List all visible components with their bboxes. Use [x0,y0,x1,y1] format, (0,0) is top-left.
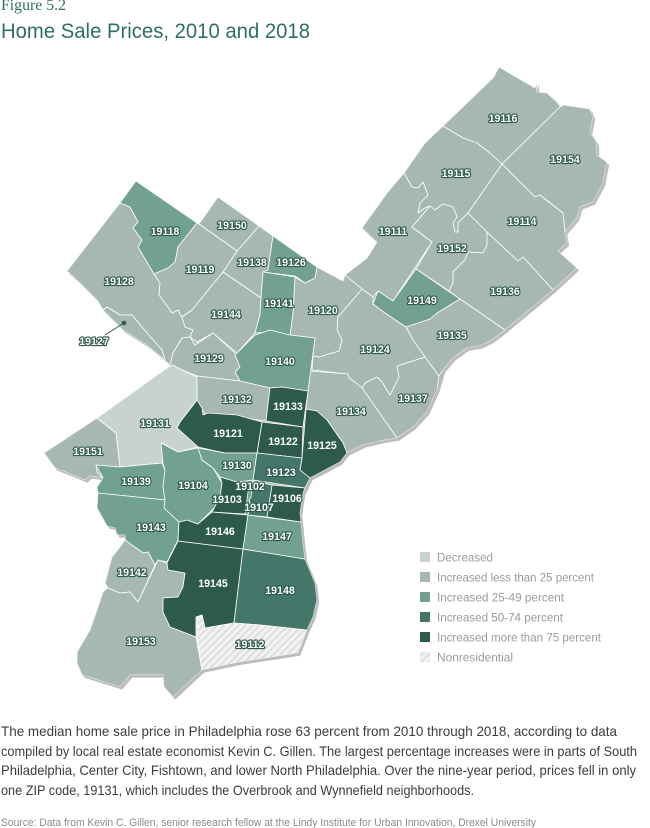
ZIP code labels: 19128 [104,276,134,288]
ZIP code areas [44,67,607,697]
ZIP code labels: 19130 [222,460,252,472]
ZIP code labels: 19122 [268,436,298,448]
ZIP code labels: 19135 [437,330,467,342]
river shadow under the city outline [46,70,609,700]
ZIP code labels: 19133 [273,401,303,413]
ZIP code labels: 19104 [178,480,208,492]
ZIP code labels: 19114 [508,216,537,228]
title: Home Sale Prices, 2010 and 2018 [1,19,310,43]
ZIP code labels: 19151 [73,446,103,458]
ZIP code labels: 19121 [213,428,243,440]
ZIP code labels: 19126 [276,257,306,269]
ZIP code labels: 19112 [236,639,265,651]
ZIP code labels: 19140 [265,356,295,368]
leader line for 19127 [105,321,126,335]
ZIP code labels: 19148 [265,585,295,597]
description paragraph: one ZIP code, 19131, which includes the Overbrook and Wynnefield neighborhoods. [1,782,474,798]
ZIP code labels: 19127 [79,336,109,348]
ZIP code labels: 19119 [186,264,215,276]
legend: Increased 50-74 percent [437,610,564,624]
ZIP code labels: 19142 [117,567,147,579]
ZIP code labels: 19137 [398,393,428,405]
ZIP code labels: 19107 [244,502,274,514]
ZIP code labels: 19123 [266,467,296,479]
ZIP code labels: 19152 [437,243,467,255]
choropleth map of Philadelphia ZIP codes [30,60,630,710]
ZIP code labels: 19131 [140,418,170,430]
legend: Increased more than 75 percent [437,630,602,644]
ZIP code labels: 19143 [136,522,166,534]
legend: Decreased [437,550,493,564]
legend: Nonresidential [437,650,513,664]
ZIP code labels: 19153 [126,636,156,648]
ZIP code labels: 19136 [490,286,520,298]
ZIP code labels: 19149 [407,295,437,307]
ZIP code labels: 19116 [489,113,518,125]
ZIP code labels: 19103 [212,494,242,506]
ZIP code labels: 19139 [121,476,151,488]
ZIP code labels: 19154 [550,154,580,166]
ZIP code labels: 19146 [205,526,235,538]
ZIP code labels: 19111 [379,226,407,238]
description paragraph [1,723,637,798]
legend: Increased 25-49 percent [437,590,565,604]
city base fill [30,60,630,710]
ZIP code labels: 19115 [442,168,471,180]
ZIP code labels: 19145 [198,578,228,590]
ZIP code labels: 19150 [217,220,247,232]
ZIP code labels: 19120 [308,305,338,317]
ZIP code labels: 19144 [211,309,241,321]
ZIP code labels [73,113,580,651]
ZIP code labels: 19134 [336,406,366,418]
nonresidential area 19112 [197,615,307,670]
ZIP code labels: 19118 [151,226,180,238]
ZIP code labels: 19106 [272,493,302,505]
ZIP code labels: 19141 [264,298,294,310]
ZIP code labels: 19124 [360,344,390,356]
ZIP code labels: 19138 [237,257,267,269]
legend [420,550,602,664]
ZIP code labels: 19129 [194,353,224,365]
ZIP code labels: 19147 [262,531,292,543]
legend: Increased less than 25 percent [437,570,595,584]
ZIP code labels: 19102 [235,481,265,493]
ZIP code labels: 19132 [222,394,252,406]
ZIP code labels: 19125 [307,440,337,452]
description paragraph: The median home sale price in Philadelphia rose 63 percent from 2010 through 2018, according to data [1,723,617,739]
